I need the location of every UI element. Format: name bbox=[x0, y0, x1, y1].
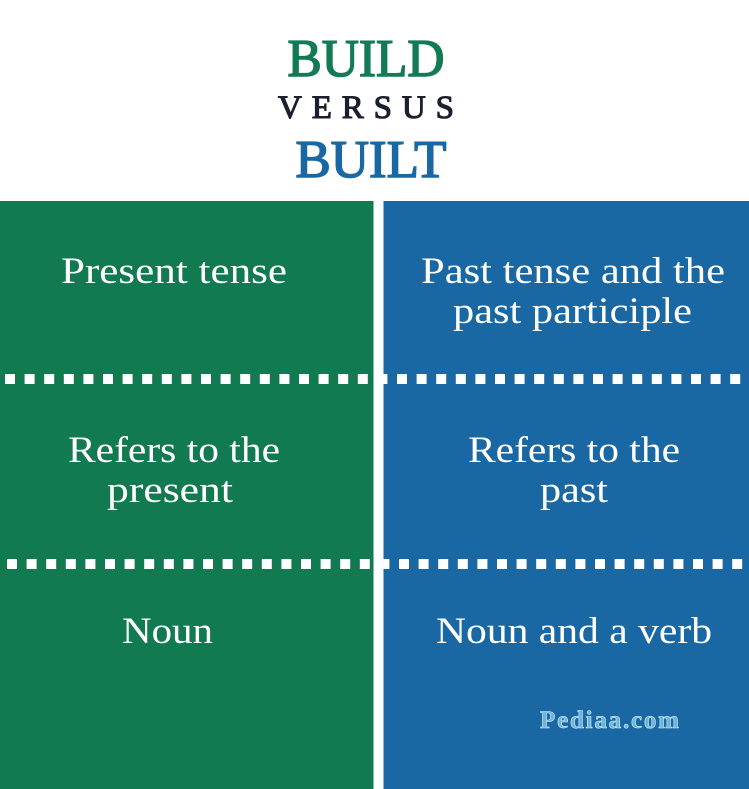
watermark: Pediaa.com: Pediaa.com bbox=[540, 707, 679, 734]
text: past tense and the past participle: past participle bbox=[453, 291, 692, 332]
divider: first dotted row bbox=[5, 374, 740, 384]
text: present tense: Present tense bbox=[61, 251, 287, 292]
text: noun and a verb: Noun and a verb bbox=[436, 611, 712, 652]
panel: built column bbox=[384, 201, 749, 789]
blue background bbox=[384, 201, 749, 789]
text: refers to the present bbox=[68, 430, 280, 511]
text: past tense and the past participle bbox=[421, 251, 725, 332]
text: refers to the past: past bbox=[540, 470, 609, 511]
divider: second dotted row bbox=[7, 559, 742, 569]
green background bbox=[0, 201, 374, 789]
title: BUILT: BUILT bbox=[296, 131, 446, 189]
title block bbox=[278, 30, 454, 189]
text: refers to the present: present bbox=[107, 470, 234, 511]
text: refers to the past: Refers to the bbox=[468, 430, 680, 471]
text: noun: Noun bbox=[122, 611, 213, 652]
text: refers to the present: Refers to the bbox=[68, 430, 280, 471]
text: past tense and the past participle: Past tense and the bbox=[421, 251, 725, 292]
panel: build column bbox=[0, 201, 374, 789]
text: refers to the past bbox=[468, 430, 680, 511]
subtitle: VERSUS: VERSUS bbox=[278, 90, 454, 126]
title: BUILD: BUILD bbox=[288, 30, 444, 88]
